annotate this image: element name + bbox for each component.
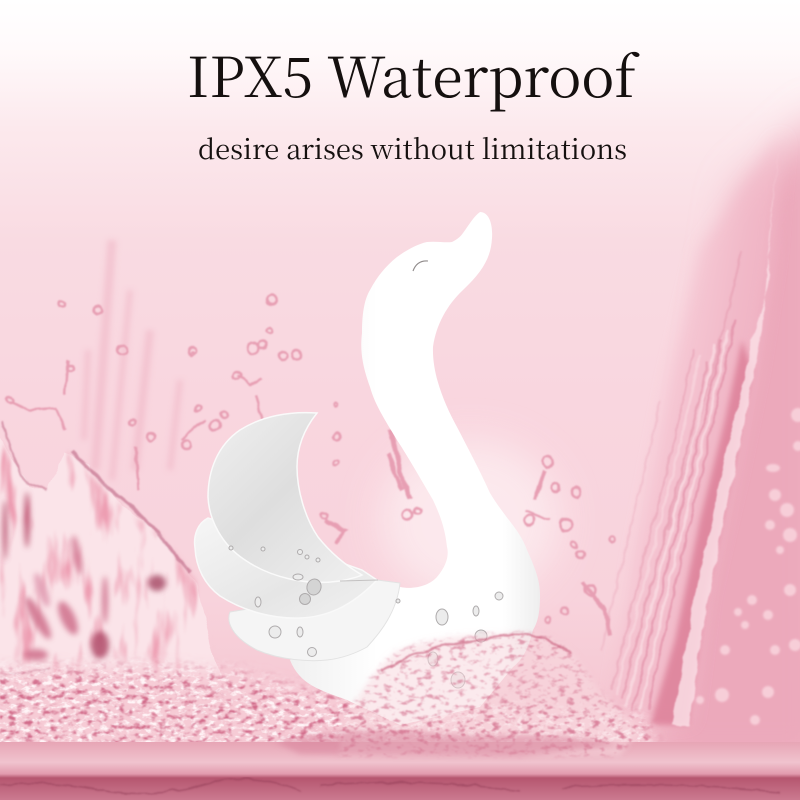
- right blurred bokeh droplets: [696, 408, 800, 725]
- subtitle: desire arises without limitations: [198, 128, 627, 167]
- front water splash: [276, 630, 631, 759]
- title: IPX5 Waterproof: [187, 33, 636, 113]
- left sheet streak texture: [0, 444, 198, 677]
- right wall ripples: [602, 250, 742, 712]
- airborne splash droplets: [7, 295, 615, 635]
- right side darker tint: [650, 110, 800, 770]
- left sheet crest lines: [0, 420, 190, 678]
- swan wing crescent: [208, 413, 362, 582]
- floor band: [0, 742, 800, 800]
- swan body and neck: [290, 212, 540, 725]
- left sheet dark streaks: [2, 492, 166, 661]
- floor dark ripples: [0, 779, 780, 794]
- right water wall: [610, 135, 782, 725]
- swan third feather: [229, 580, 400, 661]
- right wall pale ripples: [616, 330, 728, 712]
- water droplets on swan: [229, 546, 503, 688]
- foam base: [0, 658, 656, 742]
- pale glow behind swan neck: [380, 440, 560, 600]
- swan second feather: [195, 518, 377, 618]
- feather seam lines: [340, 580, 378, 581]
- left faint water column: [84, 240, 180, 480]
- left water sheet: [0, 420, 235, 700]
- swan: [195, 212, 540, 725]
- swan eye: [413, 261, 428, 271]
